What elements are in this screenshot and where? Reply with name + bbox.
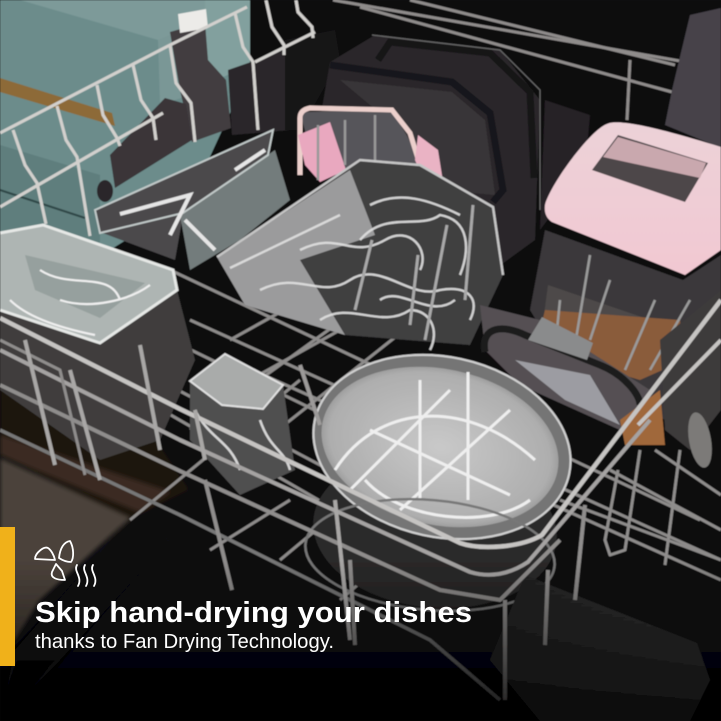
teal kitchen wall bbox=[0, 0, 250, 350]
icon: fan with heat waves bbox=[35, 541, 95, 586]
pink square canister bbox=[530, 122, 721, 420]
upper left glass dish bbox=[95, 130, 290, 270]
front rack wires and tines bbox=[0, 300, 721, 700]
yellow accent bar bbox=[0, 527, 15, 666]
lower door tray bbox=[490, 575, 710, 721]
subheading: thanks to Fan Drying Technology. bbox=[35, 631, 334, 653]
back upper rack wires bbox=[0, 0, 720, 236]
lower rack floor wires bbox=[110, 270, 721, 600]
small glass tumbler bbox=[190, 354, 295, 495]
gold cabinet handle bbox=[0, 78, 115, 126]
large round glass bowl bbox=[296, 332, 588, 621]
floor: wood and carpet bbox=[0, 340, 190, 721]
pink rimmed glass lid bbox=[298, 108, 444, 213]
back tumbler bbox=[665, 8, 721, 148]
dark food-storage lids standing in back bbox=[320, 35, 590, 280]
heading: Skip hand-drying your dishes bbox=[35, 597, 472, 629]
left glass lid and body bbox=[0, 225, 195, 460]
bottom text shade bbox=[0, 560, 721, 721]
big square glass dish bbox=[217, 160, 503, 350]
right side latch and bracket bbox=[660, 290, 721, 469]
clipped glass lid with grey latch bbox=[480, 305, 665, 445]
dark back wall panels and detergent bottle bbox=[97, 0, 721, 202]
